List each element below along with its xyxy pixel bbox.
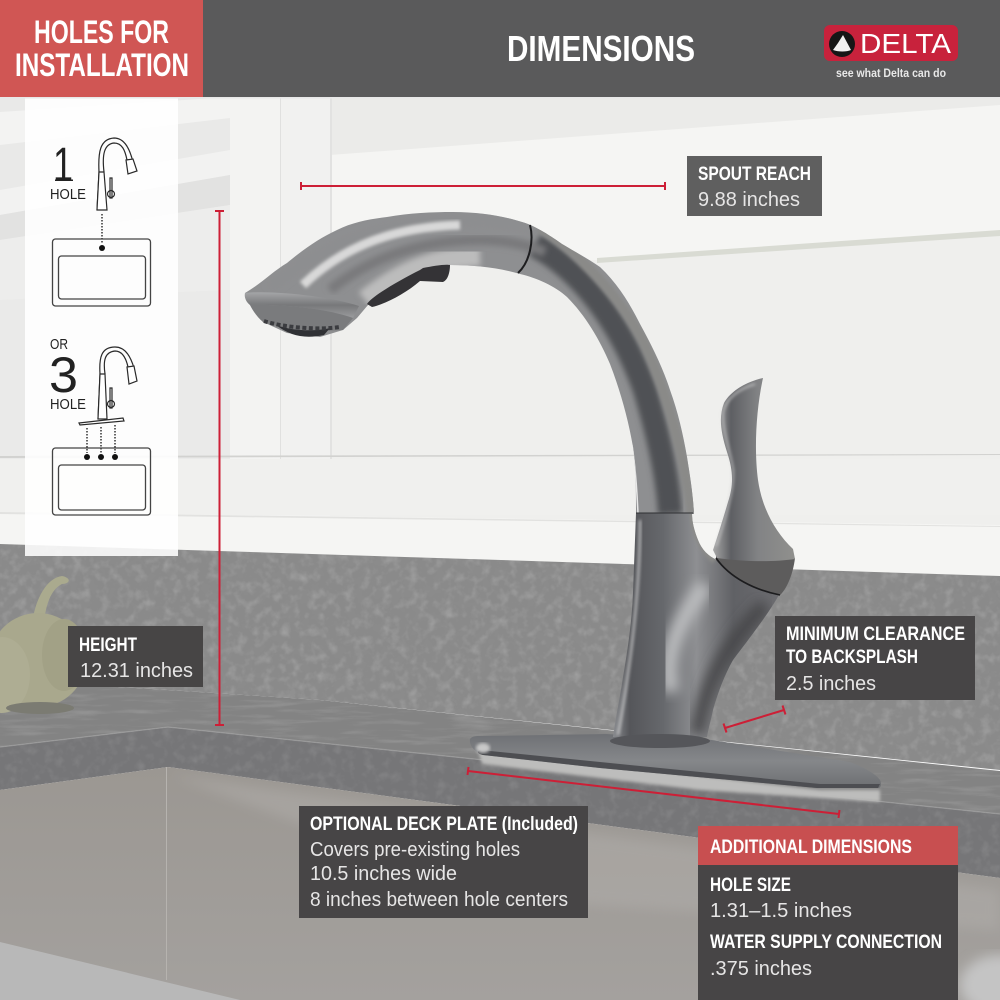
callout: height [68,626,203,687]
label hole: HOLE [50,396,86,413]
faucet: spray head rim [245,292,359,318]
heading: holes for installation: INSTALLATION [15,47,189,83]
arrow: height dimension line [215,211,224,725]
hole size: HOLE SIZE [710,874,791,896]
logo: delta [824,25,958,80]
background: wall and window [0,97,1000,580]
arrow: backsplash clearance line [724,706,786,732]
callout: optional deck plate: Covers pre-existing holes [310,839,520,861]
callout: spout reach: 9.88 inches [698,189,800,211]
callout: optional deck plate: 10.5 inches wide [310,863,457,885]
panel heading: ADDITIONAL DIMENSIONS [710,836,912,858]
faucet: handle base [716,556,795,595]
callout: height: 12.31 inches [80,660,193,682]
water supply connection: WATER SUPPLY CONNECTION [710,931,942,953]
callout: minimum clearance [775,616,975,700]
hole size: 1.31–1.5 inches [710,900,852,922]
icon: three hole sink [52,448,150,515]
label or: OR [50,336,68,353]
faucet: deck plate [470,734,881,788]
icon: faucet with deck plate [79,347,137,425]
faucet: deck plate front edge [478,750,880,788]
faucet: spray head cone [250,305,353,331]
panel header [698,826,958,865]
heading: holes for installation [15,14,189,83]
faucet: deck plate left highlight [476,743,490,753]
background: cabinet front [0,767,1000,1000]
numeral 3: 3 [49,347,78,403]
callout: optional deck plate [299,806,588,918]
icon: single hole sink [52,239,150,306]
logo: delta: DELTA [860,28,951,59]
background: countertop [0,675,1000,885]
arrow: deck plate width line [468,767,840,818]
callout: spout reach: SPOUT REACH [698,163,811,185]
heading: holes for installation: HOLES FOR [34,14,169,50]
background: granite backsplash [0,540,1000,780]
faucet: deck plate reflection [478,750,880,802]
callout: minimum clearance: MINIMUM CLEARANCE [786,623,965,645]
arrow: spout reach dimension line [301,182,665,190]
callout: height: HEIGHT [79,634,137,656]
faucet: spray nozzles [264,321,340,337]
faucet [245,212,881,802]
callout: optional deck plate: 8 inches between hole centers [310,889,568,911]
water supply connection [710,931,942,980]
install option: 3 hole [49,336,150,515]
callout: minimum clearance: 2.5 inches [786,673,876,695]
callout: optional deck plate: OPTIONAL DECK PLATE (Included) [310,813,578,835]
hole size [710,874,852,922]
icon: dotted drop lines [87,425,115,453]
callout: minimum clearance: TO BACKSPLASH [786,646,918,668]
install option: 1 hole [50,138,150,306]
faucet: sprayer button [367,265,450,307]
header bar [0,0,1000,98]
faucet: handle lever [713,378,795,561]
callout: spout reach [687,156,822,216]
water supply connection: .375 inches [710,958,812,980]
heading: dimensions: DIMENSIONS [507,28,695,69]
faucet: body [610,513,780,748]
background: pumpkins [0,576,86,714]
header: red title block [0,0,203,97]
icon: faucet outline [97,138,137,210]
label hole: HOLE [50,186,86,203]
faucet: handle highlight [716,384,755,546]
faucet: spout [245,212,694,514]
icon: dotted drop line [101,214,103,244]
logo: delta: see what Delta can do [836,68,946,80]
numeral 1: 1 [53,139,73,192]
left translucent panel [25,97,178,556]
panel: additional dimensions [698,826,958,1000]
